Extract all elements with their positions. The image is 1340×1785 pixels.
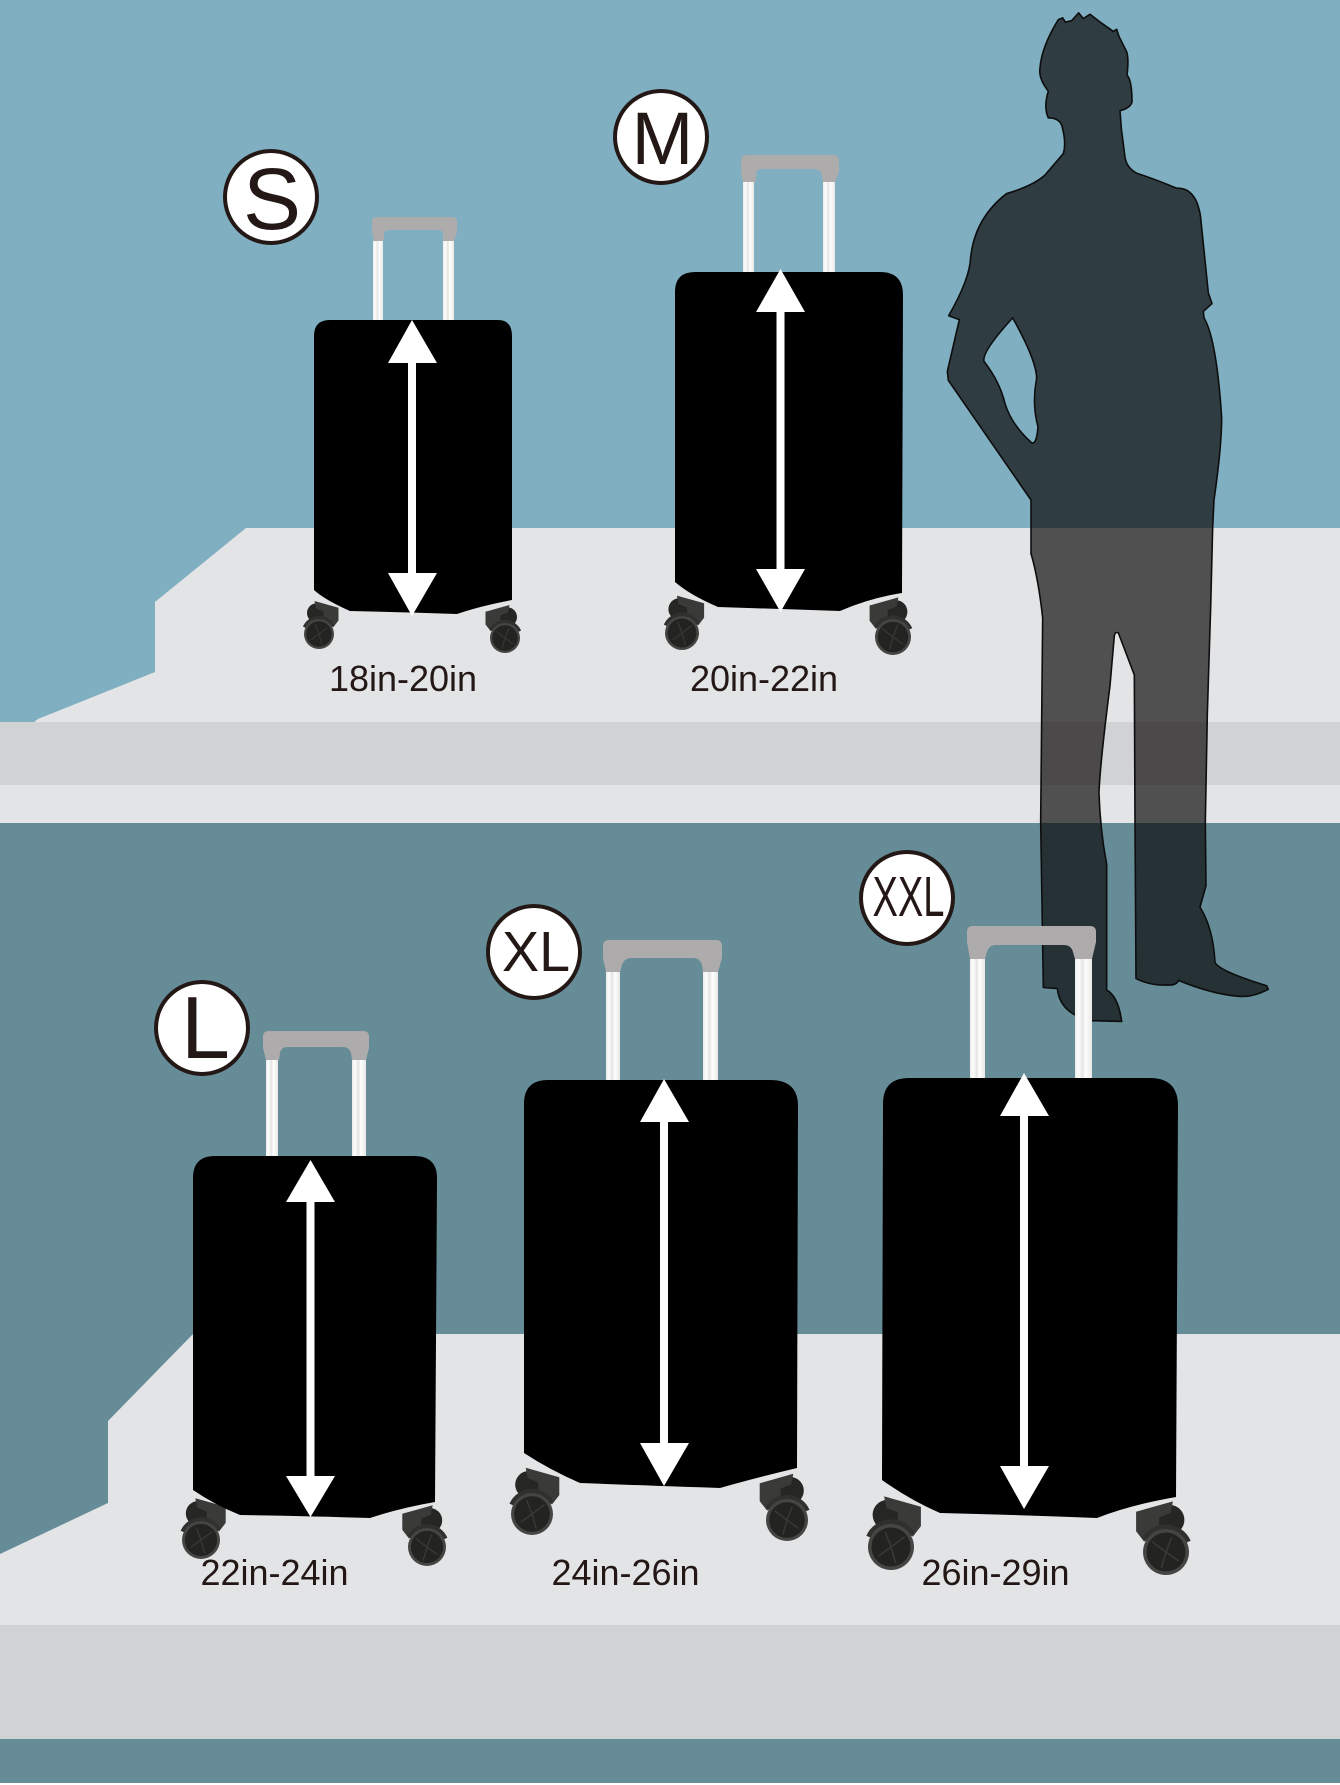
suitcase: size XXL <box>861 852 1189 1593</box>
panel: lower background wall <box>0 823 1340 1783</box>
telescopic handle <box>372 217 457 321</box>
person silhouette for scale <box>947 13 1268 1021</box>
size badge M <box>615 91 707 183</box>
size badge S: S <box>243 151 301 248</box>
telescopic handle <box>741 155 839 273</box>
upper floor with steps <box>0 528 1340 823</box>
size range label: 22in-24in <box>200 1552 349 1593</box>
suitcase: size S <box>225 151 520 699</box>
height arrow <box>388 320 437 616</box>
suitcase body <box>193 1156 437 1518</box>
suitcase: size L <box>156 978 446 1593</box>
height arrow <box>640 1079 689 1486</box>
wheels <box>665 596 911 655</box>
suitcase body <box>524 1080 798 1488</box>
size badge XXL <box>861 852 953 944</box>
suitcase body <box>882 1078 1178 1518</box>
height arrow <box>286 1160 335 1517</box>
telescopic handle <box>603 940 722 1081</box>
wheels <box>511 1468 808 1541</box>
telescopic handle <box>263 1031 369 1157</box>
lower floor with steps <box>0 1334 1340 1739</box>
suitcase: size XL <box>488 906 808 1593</box>
size range label: 20in-22in <box>690 658 838 699</box>
suitcase body <box>314 320 512 614</box>
size range label: 24in-26in <box>551 1552 700 1593</box>
height arrow <box>1000 1073 1049 1509</box>
height arrow <box>756 269 805 612</box>
size badge S <box>225 151 317 248</box>
size badge XL: XL <box>502 920 570 984</box>
size badge M: M <box>632 97 693 180</box>
size range label: 26in-29in <box>921 1552 1070 1593</box>
size badge XXL: XXL <box>872 865 944 929</box>
size badge L: L <box>181 978 230 1077</box>
suitcase: size M <box>615 91 911 699</box>
size badge L <box>156 978 248 1077</box>
size range label: 18in-20in <box>329 658 477 699</box>
wheels <box>182 1498 446 1566</box>
size badge XL <box>488 906 580 998</box>
panel: upper background wall <box>0 0 1340 823</box>
suitcase body <box>675 272 903 611</box>
telescopic handle <box>967 926 1096 1079</box>
wheels <box>304 601 520 653</box>
wheels <box>868 1496 1189 1575</box>
